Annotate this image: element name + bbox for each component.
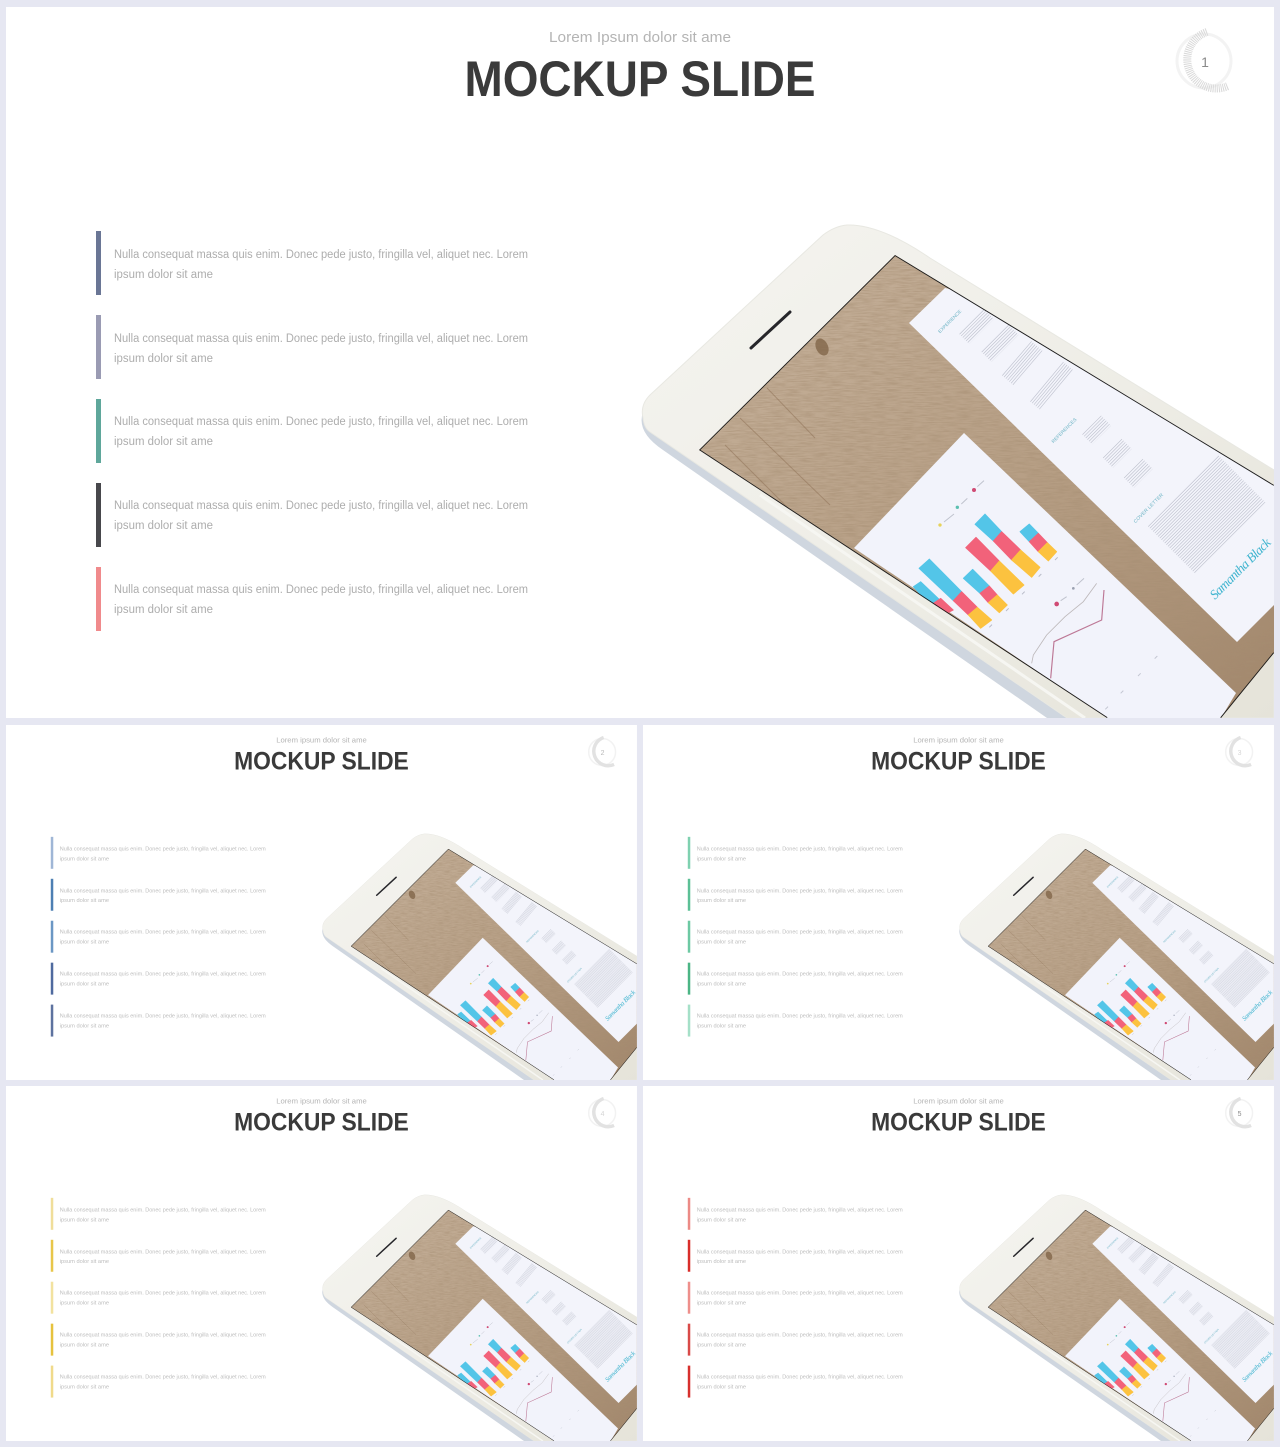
slide 1 subtitle: Lorem Ipsum dolor sit ame	[549, 29, 731, 46]
slide 5 text row 4: ipsum dolor sit ame	[697, 1343, 746, 1349]
slide 3 text row 3: Nulla consequat massa quis enim. Donec pede justo, fringilla vel, aliquet nec. Lorem	[697, 930, 903, 936]
slide 5 text row 4	[688, 1324, 903, 1356]
slide 2 subtitle: Lorem ipsum dolor sit ame	[276, 735, 367, 744]
slide 4 text row 3	[51, 1282, 266, 1314]
slide 5 phone mockup	[959, 1195, 1275, 1441]
slide 5 page number badge: 5	[1238, 1111, 1242, 1118]
slide 3 text row 2: ipsum dolor sit ame	[697, 898, 746, 904]
slide 4 text row 5: Nulla consequat massa quis enim. Donec pede justo, fringilla vel, aliquet nec. Lorem	[60, 1375, 266, 1381]
slide 2 text row 3: ipsum dolor sit ame	[60, 940, 109, 946]
slide 1 text row 2: Nulla consequat massa quis enim. Donec pede justo, fringilla vel, aliquet nec. Lorem	[114, 333, 528, 345]
slide 3: green variant	[643, 725, 1275, 1080]
slide 2 text row 2: ipsum dolor sit ame	[60, 898, 109, 904]
slide 5 text row 3: Nulla consequat massa quis enim. Donec pede justo, fringilla vel, aliquet nec. Lorem	[697, 1291, 903, 1297]
slide 1 text row 2: ipsum dolor sit ame	[114, 353, 213, 365]
slide 3 phone mockup	[959, 834, 1275, 1080]
resume text lines	[972, 322, 1230, 538]
slide 1 phone mockup	[642, 225, 1274, 718]
slide 1 text row 1	[96, 231, 528, 295]
wood background	[699, 255, 1274, 718]
slide 4 background	[6, 1086, 637, 1441]
slide 3 text row 2: Nulla consequat massa quis enim. Donec pede justo, fringilla vel, aliquet nec. Lorem	[697, 888, 903, 894]
slide 4 text row 3: ipsum dolor sit ame	[60, 1301, 109, 1307]
slide 5 page number badge	[1226, 1098, 1253, 1127]
slide 1 title: MOCKUP SLIDE	[464, 51, 816, 107]
slide 4 title: MOCKUP SLIDE	[234, 1108, 409, 1136]
slide 4 text row 1	[51, 1198, 266, 1230]
resume section heading: cover letter: COVER LETTER	[1133, 492, 1165, 524]
signature: Samantha Black	[1207, 534, 1274, 602]
slide 3 text row 1: ipsum dolor sit ame	[697, 856, 746, 862]
slide 4 phone mockup	[322, 1195, 638, 1441]
slide 2 text row 4	[51, 963, 266, 995]
slide 2 text row 1	[51, 837, 266, 869]
slide 2 title: MOCKUP SLIDE	[234, 747, 409, 775]
slide 2 text row 3	[51, 921, 266, 953]
slide 1 text row 2	[96, 315, 528, 379]
phone front face	[642, 225, 1274, 718]
slide 1 text row 3: ipsum dolor sit ame	[114, 436, 213, 448]
slide 2 text row 2: Nulla consequat massa quis enim. Donec pede justo, fringilla vel, aliquet nec. Lorem	[60, 888, 266, 894]
slide 5 text row 3: ipsum dolor sit ame	[697, 1301, 746, 1307]
slide 4 text row 2: Nulla consequat massa quis enim. Donec pede justo, fringilla vel, aliquet nec. Lorem	[60, 1249, 266, 1255]
slide 1 text row 4	[96, 483, 528, 547]
slide 3 page number badge	[1226, 737, 1253, 766]
slide 5 text row 2: Nulla consequat massa quis enim. Donec pede justo, fringilla vel, aliquet nec. Lorem	[697, 1249, 903, 1255]
slide 3 text row 1	[688, 837, 903, 869]
resume sheet	[909, 288, 1274, 642]
slide 4 text row 1: ipsum dolor sit ame	[60, 1217, 109, 1223]
slide 1 text row 5: Nulla consequat massa quis enim. Donec pede justo, fringilla vel, aliquet nec. Lorem	[114, 584, 528, 596]
resume section heading: references: REFERENCES	[1051, 417, 1078, 444]
slide 5 text row 3	[688, 1282, 903, 1314]
phone side edge	[642, 412, 1085, 718]
slide 2 phone mockup	[322, 834, 638, 1080]
slide 1 text row 1: ipsum dolor sit ame	[114, 269, 213, 281]
slide 5 text row 2	[688, 1240, 903, 1272]
slide 2 text row 4: ipsum dolor sit ame	[60, 982, 109, 988]
slide 3 text row 5: Nulla consequat massa quis enim. Donec pede justo, fringilla vel, aliquet nec. Lorem	[697, 1014, 903, 1020]
slide 5 title: MOCKUP SLIDE	[871, 1108, 1046, 1136]
slide 1 background	[6, 7, 1274, 718]
slide 4 page number badge: 4	[601, 1111, 605, 1118]
slide 5 text row 1: Nulla consequat massa quis enim. Donec pede justo, fringilla vel, aliquet nec. Lorem	[697, 1207, 903, 1213]
slide 2 text row 3: Nulla consequat massa quis enim. Donec pede justo, fringilla vel, aliquet nec. Lorem	[60, 930, 266, 936]
phone speaker	[751, 312, 790, 348]
line chart	[1032, 583, 1104, 678]
slide 3 text row 3: ipsum dolor sit ame	[697, 940, 746, 946]
slide 5 text row 5	[688, 1366, 903, 1398]
slide 5 text row 5: ipsum dolor sit ame	[697, 1385, 746, 1391]
slide 1 text row 5	[96, 567, 528, 631]
slide 4: yellow variant	[6, 1086, 638, 1441]
slide 1 text row 3	[96, 399, 528, 463]
line chart legend	[1054, 578, 1157, 709]
slide 5: red variant	[643, 1086, 1275, 1441]
slide 3 page number badge: 3	[1238, 750, 1242, 757]
slide 2 background	[6, 725, 637, 1080]
stacked bar chart	[913, 514, 1057, 628]
slide 4 text row 1: Nulla consequat massa quis enim. Donec pede justo, fringilla vel, aliquet nec. Lorem	[60, 1207, 266, 1213]
slide 5 text row 1	[688, 1198, 903, 1230]
slide 2 text row 1: ipsum dolor sit ame	[60, 856, 109, 862]
slide 2 page number badge	[589, 737, 616, 766]
slide 4 text row 4: Nulla consequat massa quis enim. Donec pede justo, fringilla vel, aliquet nec. Lorem	[60, 1333, 266, 1339]
slide 4 text row 2: ipsum dolor sit ame	[60, 1259, 109, 1265]
slide 2 text row 4: Nulla consequat massa quis enim. Donec pede justo, fringilla vel, aliquet nec. Lorem	[60, 972, 266, 978]
slide 4 text row 3: Nulla consequat massa quis enim. Donec pede justo, fringilla vel, aliquet nec. Lorem	[60, 1291, 266, 1297]
slide 1 text row 5: ipsum dolor sit ame	[114, 604, 213, 616]
slide 3 text row 4	[688, 963, 903, 995]
slide 3 background	[643, 725, 1274, 1080]
slide 4 text row 2	[51, 1240, 266, 1272]
slide 5 background	[643, 1086, 1274, 1441]
slide 4 text row 4	[51, 1324, 266, 1356]
slide 2 page number badge: 2	[601, 750, 605, 757]
slide 3 text row 2	[688, 879, 903, 911]
slide 5 text row 1: ipsum dolor sit ame	[697, 1217, 746, 1223]
slide 1 text row 3: Nulla consequat massa quis enim. Donec pede justo, fringilla vel, aliquet nec. Lorem	[114, 416, 528, 428]
slide 2 text row 5: ipsum dolor sit ame	[60, 1024, 109, 1030]
slide 5 text row 4: Nulla consequat massa quis enim. Donec pede justo, fringilla vel, aliquet nec. Lorem	[697, 1333, 903, 1339]
slide 3 text row 4: ipsum dolor sit ame	[697, 982, 746, 988]
slide 2 text row 1: Nulla consequat massa quis enim. Donec pede justo, fringilla vel, aliquet nec. Lorem	[60, 846, 266, 852]
wood knot and cracks	[725, 336, 831, 510]
slide 4 text row 4: ipsum dolor sit ame	[60, 1343, 109, 1349]
slide 3 subtitle: Lorem ipsum dolor sit ame	[913, 735, 1004, 744]
chart sheet	[854, 433, 1236, 718]
slide 1 text row 1: Nulla consequat massa quis enim. Donec pede justo, fringilla vel, aliquet nec. Lorem	[114, 249, 528, 261]
slide 5 subtitle: Lorem ipsum dolor sit ame	[913, 1096, 1004, 1105]
slide 4 text row 5: ipsum dolor sit ame	[60, 1385, 109, 1391]
slide 5 text row 2: ipsum dolor sit ame	[697, 1259, 746, 1265]
slide 3 text row 4: Nulla consequat massa quis enim. Donec pede justo, fringilla vel, aliquet nec. Lorem	[697, 972, 903, 978]
slide 4 text row 5	[51, 1366, 266, 1398]
phone screen border	[699, 255, 1274, 718]
slide 2 text row 5: Nulla consequat massa quis enim. Donec pede justo, fringilla vel, aliquet nec. Lorem	[60, 1014, 266, 1020]
slide 2 text row 5	[51, 1005, 266, 1037]
slide 1 text row 4: ipsum dolor sit ame	[114, 520, 213, 532]
slide 3 text row 1: Nulla consequat massa quis enim. Donec pede justo, fringilla vel, aliquet nec. Lorem	[697, 846, 903, 852]
bar chart legend	[938, 481, 1058, 627]
resume section heading: experience: EXPERIENCE	[937, 309, 962, 334]
phone lower rim highlight	[760, 495, 1085, 718]
slide 4 page number badge	[589, 1098, 616, 1127]
slide 5 text row 5: Nulla consequat massa quis enim. Donec pede justo, fringilla vel, aliquet nec. Lorem	[697, 1375, 903, 1381]
slide 3 text row 5	[688, 1005, 903, 1037]
slide 1 page number badge	[1177, 32, 1231, 88]
slide 4 subtitle: Lorem ipsum dolor sit ame	[276, 1096, 367, 1105]
slide 2 text row 2	[51, 879, 266, 911]
slide 2: blue variant	[6, 725, 638, 1080]
slide 1 text row 4: Nulla consequat massa quis enim. Donec pede justo, fringilla vel, aliquet nec. Lorem	[114, 500, 528, 512]
slide 3 text row 5: ipsum dolor sit ame	[697, 1024, 746, 1030]
slide 3 text row 3	[688, 921, 903, 953]
phone screen	[699, 255, 1274, 718]
slide 1 page number badge: 1	[1201, 54, 1209, 70]
slide 3 title: MOCKUP SLIDE	[871, 747, 1046, 775]
